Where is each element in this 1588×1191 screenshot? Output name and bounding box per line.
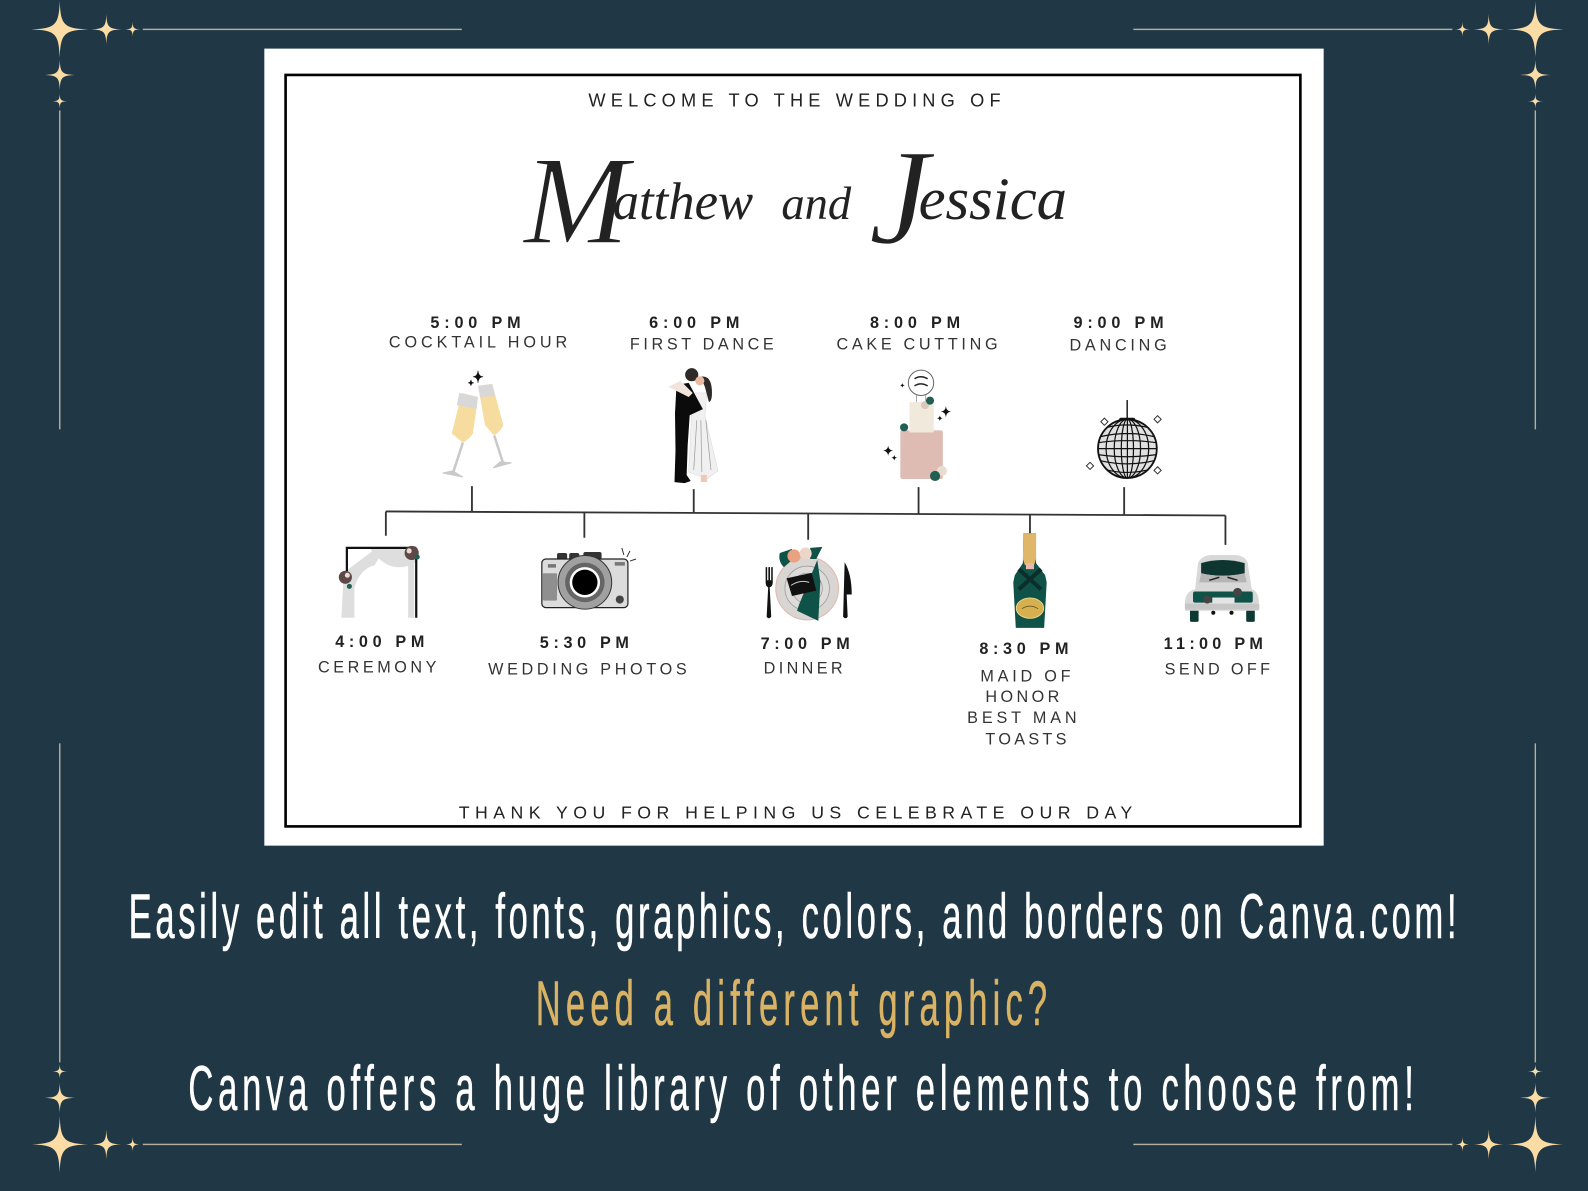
icon: wedding cake <box>883 370 951 481</box>
corner ornament: top left <box>31 1 462 429</box>
caption: edit on Canva: Easily edit all text, fonts, graphics, colors, and borders on Canva.com! <box>129 881 1457 951</box>
event: 6:00 pm first dance: 6:00 PM <box>649 314 739 332</box>
event: 8:30 pm toasts: BEST MAN <box>967 709 1077 727</box>
icon: champagne glasses <box>443 371 511 477</box>
event: 5:00 pm cocktail hour: COCKTAIL HOUR <box>389 333 567 351</box>
event: 4:00 pm ceremony: 4:00 PM <box>335 633 424 651</box>
heading: couple names: essica <box>919 166 1067 233</box>
icon: dancing couple <box>668 368 718 483</box>
event: 8:00 pm cake cutting <box>837 314 998 481</box>
caption: Canva library: Canva offers a huge library of other elements to choose from! <box>188 1053 1414 1124</box>
event: 7:00 pm dinner: 7:00 PM <box>761 635 850 653</box>
event: 8:00 pm cake cutting: 8:00 PM <box>870 314 960 332</box>
event: 4:00 pm ceremony: CEREMONY <box>318 658 437 676</box>
event: 7:00 pm dinner: DINNER <box>764 659 843 677</box>
event: 11:00 pm send off <box>1164 555 1270 678</box>
corner ornament: bottom right <box>1133 743 1564 1173</box>
heading: couple names: J <box>869 121 936 273</box>
icon: getaway car <box>1185 555 1259 622</box>
event: 5:30 pm wedding photos: 5:30 PM <box>540 634 629 652</box>
event: 5:00 pm cocktail hour: 5:00 PM <box>430 314 521 332</box>
event: 5:00 pm cocktail hour <box>389 314 567 477</box>
event: 9:00 pm dancing: 9:00 PM <box>1074 314 1164 332</box>
heading: couple names: and <box>770 178 852 230</box>
event: 9:00 pm dancing <box>1069 314 1167 478</box>
corner ornament: bottom left <box>31 743 462 1173</box>
icon: champagne bottle <box>1013 533 1047 628</box>
heading: welcome line: WELCOME TO THE WEDDING OF <box>588 90 1001 110</box>
event: 5:30 pm wedding photos: WEDDING PHOTOS <box>488 660 687 678</box>
event: 6:00 pm first dance: FIRST DANCE <box>630 335 774 353</box>
event: 4:00 pm ceremony <box>318 546 437 676</box>
heading: couple names: M <box>522 131 636 271</box>
icon: disco ball <box>1086 400 1161 478</box>
event: 8:30 pm toasts: 8:30 PM <box>979 640 1068 658</box>
event: 8:30 pm toasts <box>967 533 1077 748</box>
event: 6:00 pm first dance <box>630 314 774 483</box>
caption: different graphic question: Need a different graphic? <box>536 968 1047 1039</box>
event: 9:00 pm dancing: DANCING <box>1069 336 1167 354</box>
panel: wedding timeline sign <box>264 49 1324 846</box>
event: 8:30 pm toasts: HONOR <box>985 688 1059 706</box>
corner ornament: top right <box>1133 1 1564 429</box>
icon: camera <box>542 548 636 609</box>
event: 11:00 pm send off: SEND OFF <box>1165 660 1270 678</box>
icon: floral arch <box>339 546 420 618</box>
event: 11:00 pm send off: 11:00 PM <box>1164 635 1263 653</box>
icon: place setting <box>766 547 852 621</box>
event: 8:00 pm cake cutting: CAKE CUTTING <box>837 335 998 353</box>
event: 8:30 pm toasts: MAID OF <box>980 668 1071 686</box>
event: 5:30 pm wedding photos <box>488 548 687 678</box>
timeline connector <box>386 486 1225 545</box>
event: 8:30 pm toasts: TOASTS <box>985 730 1067 748</box>
heading: couple names: atthew <box>613 173 753 231</box>
closing line: THANK YOU FOR HELPING US CELEBRATE OUR DAY <box>459 802 1132 822</box>
event: 7:00 pm dinner <box>761 547 852 677</box>
